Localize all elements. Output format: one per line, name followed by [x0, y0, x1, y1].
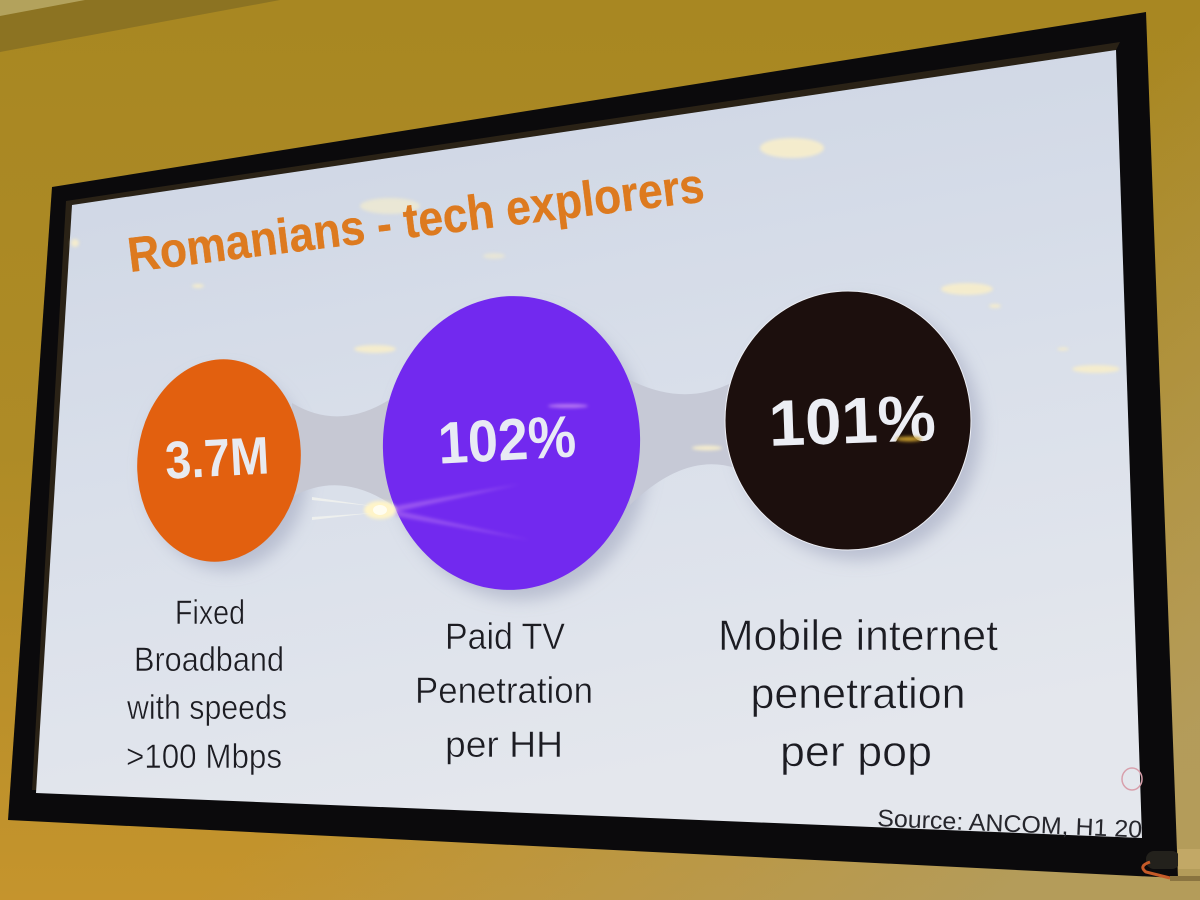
source note: Source: ANCOM, H1 20	[877, 805, 1143, 844]
label: paid tv: Penetration	[415, 670, 593, 711]
lens flare	[312, 497, 396, 520]
label: paid tv: per HH	[445, 724, 563, 765]
circle: purple 102%	[373, 287, 650, 599]
title: Romanians - tech explorers	[125, 159, 707, 283]
screen reflections	[71, 138, 1120, 450]
label: fixed broadband: Broadband	[134, 641, 284, 679]
label: mobile internet: penetration	[750, 670, 966, 718]
circle: orange 3.7M: 3.7M	[164, 426, 271, 491]
shadows behind circles	[144, 300, 981, 600]
connector: purple to black	[630, 380, 735, 505]
label: fixed broadband: Fixed	[175, 594, 245, 632]
label: mobile internet	[718, 612, 998, 776]
label: paid tv: Paid TV	[445, 616, 565, 657]
label: mobile internet: per pop	[780, 728, 932, 776]
connector: orange to purple	[292, 398, 392, 505]
label: fixed broadband: >100 Mbps	[126, 738, 282, 776]
circle: orange 3.7M	[126, 350, 312, 571]
circle: black 101%	[725, 291, 971, 550]
label: paid tv	[415, 616, 593, 765]
label: fixed broadband	[126, 594, 287, 776]
circle: black 101%: 101%	[767, 381, 937, 460]
label: fixed broadband: with speeds	[126, 689, 287, 727]
cable connector	[1143, 849, 1200, 881]
label: mobile internet: Mobile internet	[718, 612, 998, 660]
icon: pink ring	[1122, 768, 1142, 790]
circle: purple 102%: 102%	[436, 403, 578, 477]
